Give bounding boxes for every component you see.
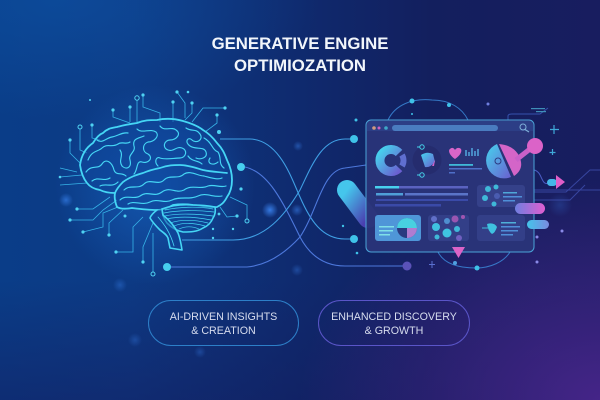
progress bars [375, 186, 468, 206]
pill: AI-driven insights: AI-DRIVEN INSIGHTS [170, 311, 277, 323]
dashboard surrounding arcs [388, 100, 600, 268]
pill: enhanced discovery [318, 300, 470, 346]
background bokeh lights [55, 85, 572, 358]
pill: enhanced discovery: & GROWTH [365, 325, 423, 337]
list card [477, 215, 525, 241]
brain circuit traces [60, 92, 247, 273]
hollow circuit rings [78, 96, 249, 276]
pink ball connector [516, 138, 543, 160]
split pie chart [486, 144, 521, 178]
brain outline [80, 119, 232, 210]
heart and bars block [449, 148, 482, 174]
floating pills [515, 203, 549, 229]
connector nodes [163, 135, 412, 271]
connector lines between brain and dashboard [167, 139, 407, 267]
brain circuit nodes [59, 90, 243, 264]
browser bar [367, 121, 533, 132]
pink triangle [452, 247, 465, 258]
thick gradient connector [347, 190, 368, 218]
bright pie card [375, 215, 421, 241]
dashboard panel [366, 120, 534, 252]
cerebellum [162, 205, 215, 232]
title: GENERATIVE ENGINE [212, 34, 388, 53]
radar icon circle [412, 145, 442, 177]
network card [477, 184, 525, 207]
temporal lobe [115, 165, 227, 193]
bubbles card [428, 215, 469, 241]
brain folds [86, 133, 144, 186]
pill: AI-driven insights: & CREATION [191, 325, 256, 337]
title [212, 34, 388, 75]
pill: enhanced discovery: ENHANCED DISCOVERY [331, 311, 457, 323]
title: OPTIMIOZATION [234, 56, 366, 75]
pill: AI-driven insights [148, 300, 299, 346]
brain illustration [80, 119, 232, 250]
arrow pill right [547, 175, 565, 189]
donut chart [380, 150, 403, 172]
decorations around dashboard [342, 98, 564, 270]
brain stem [150, 209, 182, 250]
